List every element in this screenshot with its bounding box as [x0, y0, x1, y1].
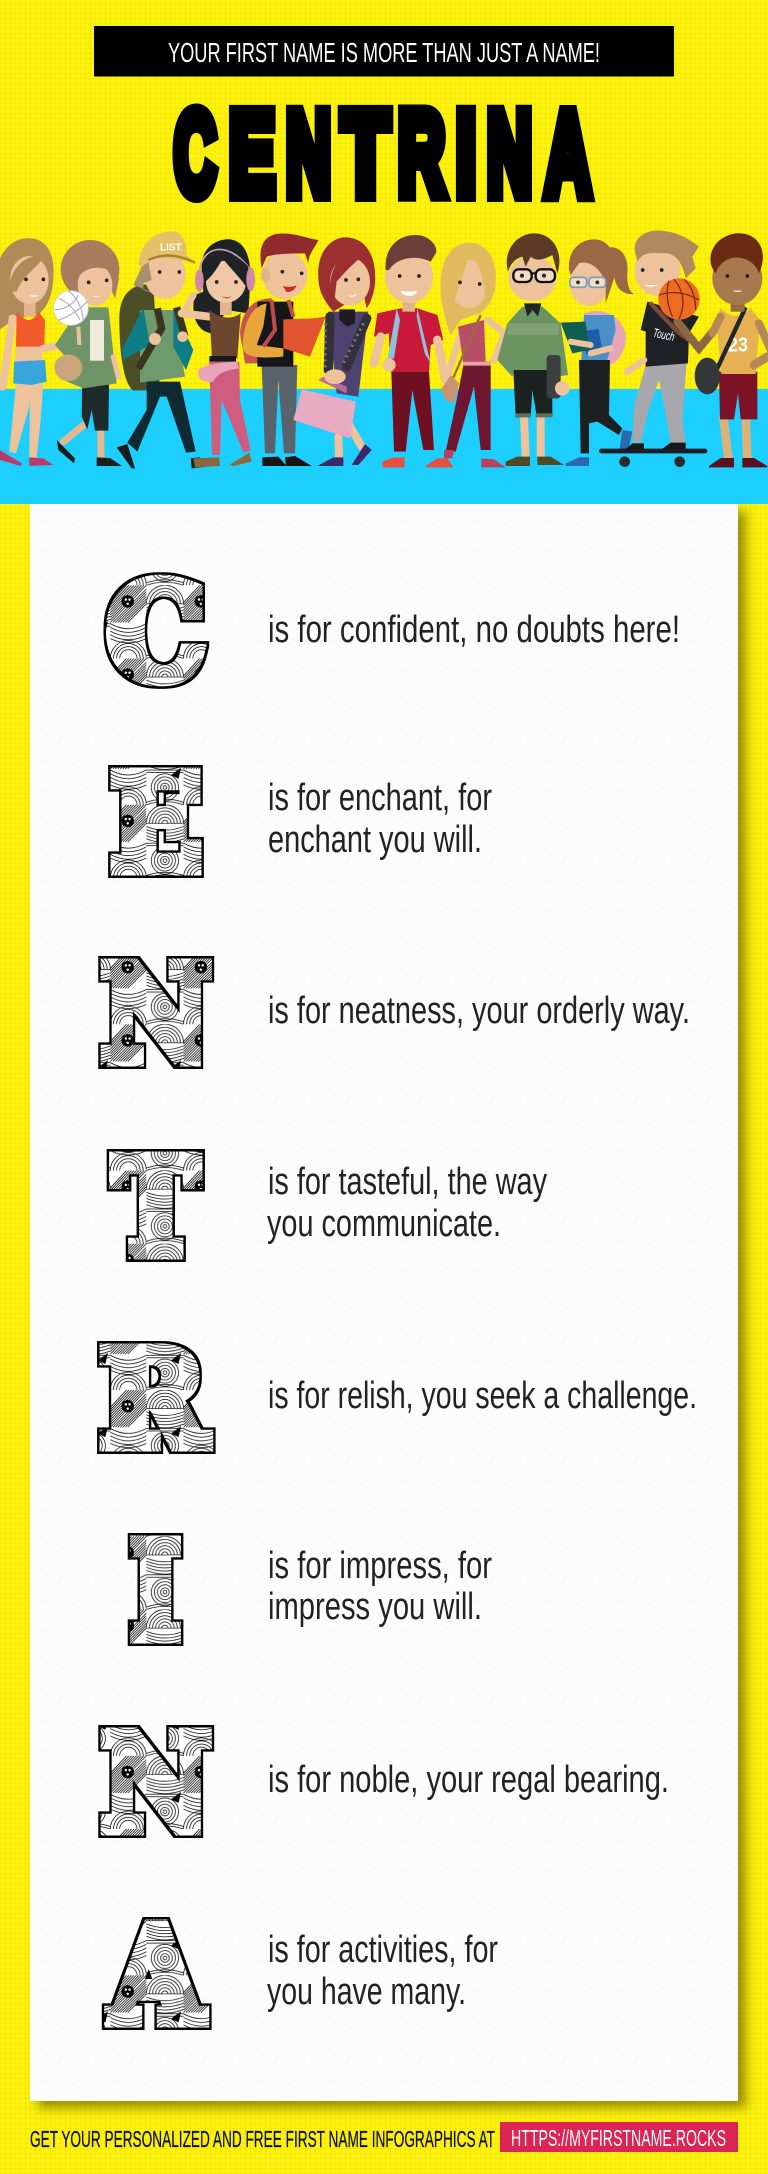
row 5: letter R [100, 1324, 697, 1476]
letter N: N [102, 940, 210, 1090]
letter A: A [110, 1900, 203, 2052]
meaning I: is for impress, for [268, 1545, 492, 1587]
title: name: A [545, 88, 591, 220]
blue floor band [0, 389, 768, 504]
meaning T: you communicate. [267, 1203, 501, 1245]
row 8: letter A [110, 1900, 498, 2052]
person 11: boy on skateboard with basketball: Touch [652, 326, 676, 344]
panel texture [30, 504, 738, 2101]
letter R: R [100, 1324, 206, 1476]
title: name: N [286, 88, 331, 220]
title: name: E [229, 88, 275, 220]
row 3: letter N [102, 940, 690, 1090]
meaning A [267, 1929, 498, 2013]
letter C: C [108, 558, 204, 708]
illustration: group of twelve students, left half [0, 231, 375, 468]
meaning T: is for tasteful, the way [268, 1161, 547, 1203]
letter T: T [114, 1132, 198, 1284]
meaning A: is for activities, for [268, 1929, 498, 1971]
person 7: boy in red shirt [374, 235, 453, 467]
footer [30, 2122, 738, 2152]
row 1: letter C [108, 558, 680, 708]
letter E: E [112, 748, 201, 900]
illustration: group of twelve students, right half [374, 231, 768, 467]
meaning E: is for enchant, for [268, 777, 492, 819]
person 1: girl in orange top [0, 238, 75, 466]
meaning T [267, 1161, 547, 1245]
letter N: N [102, 1708, 210, 1860]
person 10: girl with ponytail and glasses [561, 239, 634, 466]
title: name: I [456, 88, 476, 220]
row 7: letter N [102, 1708, 669, 1860]
row 2: letter E [112, 748, 492, 900]
title: name: C [174, 88, 216, 220]
panel: white letter list background [30, 504, 738, 2101]
person 3: boy with cap and backpack: LIST [160, 243, 182, 254]
row 4: letter T [114, 1132, 547, 1284]
person 3: boy with cap and backpack [117, 231, 207, 468]
title: name: T [342, 88, 389, 220]
meaning A: you have many. [267, 1971, 466, 2013]
top banner [94, 26, 674, 76]
title: name: N [487, 88, 532, 220]
person 5: boy reading a red book [240, 234, 326, 466]
meaning E: enchant you will. [268, 819, 482, 861]
meaning I: impress you will. [268, 1586, 482, 1628]
meaning I [268, 1545, 492, 1628]
person 6: girl with pink bag [293, 237, 375, 466]
person 9: boy with glasses in green sweater [497, 233, 570, 466]
person 2: girl in green jacket with volleyball [54, 240, 122, 466]
person 8: blonde girl [441, 243, 506, 467]
meaning E [268, 777, 492, 861]
letter I: I [131, 1516, 180, 1668]
person 11: boy on skateboard with basketball [599, 231, 716, 467]
title: name: R [398, 88, 445, 220]
person 12: boy with jersey and shoulder bag [695, 233, 768, 467]
row 6: letter I [131, 1516, 492, 1668]
person 4: girl with pink headphones [182, 239, 255, 467]
person 12: boy with jersey and shoulder bag: 23 [728, 334, 748, 357]
